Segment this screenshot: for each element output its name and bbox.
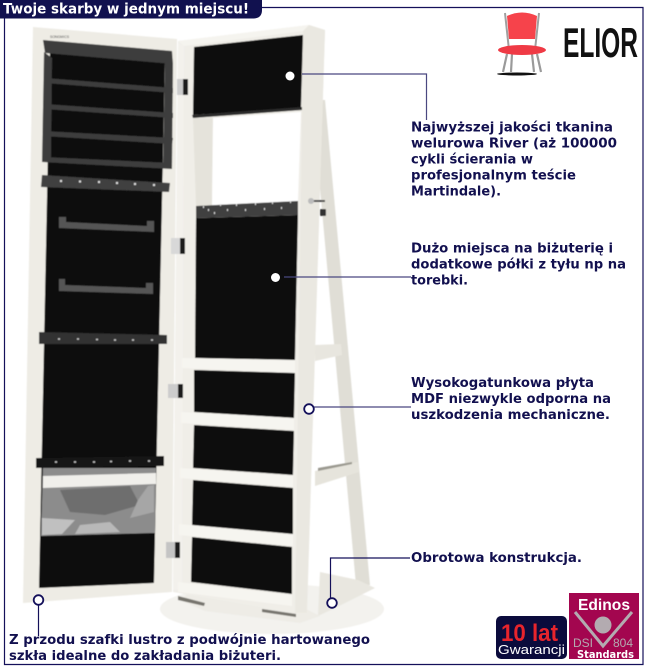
text block: MDF: MDF niezwykle odporna na [411,392,611,407]
text block: fabric: welurowa River (aż 100000 [411,136,617,152]
ladder stand with back shelves [312,100,375,616]
text block: storage [411,242,626,288]
door fabric [39,50,165,588]
mirror door [23,27,188,603]
open gap [212,112,301,206]
hook rail three [36,456,164,468]
brand logo: Elior [497,12,638,76]
callout leader: mirror [34,595,43,636]
hook rail one [41,175,170,192]
text block: mirror: szkła idealne do zakładania biżuteri. [9,649,281,664]
badge: Edinos DSI 804 standards [569,593,639,661]
bracelet handles [59,217,154,232]
text block: fabric: cykli ścierania w [411,152,533,168]
text block: rotation: Obrotowa konstrukcja. [411,551,582,566]
clear pouch [41,468,156,536]
text block: mirror: Z przodu szafki lustro z podwójnie hartowanego [9,632,370,648]
callout leader: fabric [286,72,426,120]
text block: fabric: Martindale). [411,184,501,200]
lower jewellery panel [195,215,298,360]
badge: Edinos DSI 804 standards: Standards [577,649,634,661]
top compartment fabric [193,35,303,115]
callout leader: rotation [327,558,410,608]
text block: storage: dodatkowe półki z tyłu np na [411,256,626,272]
badge: Edinos DSI 804 standards: Edinos [578,597,630,614]
earring rail [196,201,298,218]
badge: 10 year warranty: 10 lat [501,620,558,647]
badge: Edinos DSI 804 standards: 804 [613,636,633,650]
text block: storage: torebki. [411,274,468,288]
hook rail two [39,332,167,344]
text block: storage: Dużo miejsca na biżuterię i [411,242,613,256]
text block: MDF: uszkodzenia mechaniczne. [411,408,610,423]
lower shelves and compartments [178,358,295,606]
title banner: Twoje skarby w jednym miejscu! [3,2,249,18]
callout leader: storage [271,273,411,282]
badge: 10 year warranty [496,616,567,659]
text block: fabric: profesjonalnym teście [411,168,576,184]
callout leader: MDF [304,404,411,414]
text block: MDF [411,376,611,423]
product illustration: rotating jewellery cabinet [23,25,384,634]
text block: mirror [9,632,370,664]
cabinet body [173,25,325,613]
badge: Edinos DSI 804 standards: DSI [573,636,593,650]
badge: 10 year warranty: Gwarancji [498,643,565,657]
hinges [166,79,188,558]
key and padlock [308,198,326,216]
text block: MDF: Wysokogatunkowa płyta [411,376,594,391]
text block: fabric: Najwyższej jakości tkanina [411,120,613,136]
text block: fabric [411,120,617,200]
rotating base disc [160,584,384,634]
ring organiser [42,40,173,169]
icon: red chair [497,12,546,76]
brand mark: SONGMICS [50,35,70,39]
base plate [180,592,320,623]
small shelf [192,107,302,118]
